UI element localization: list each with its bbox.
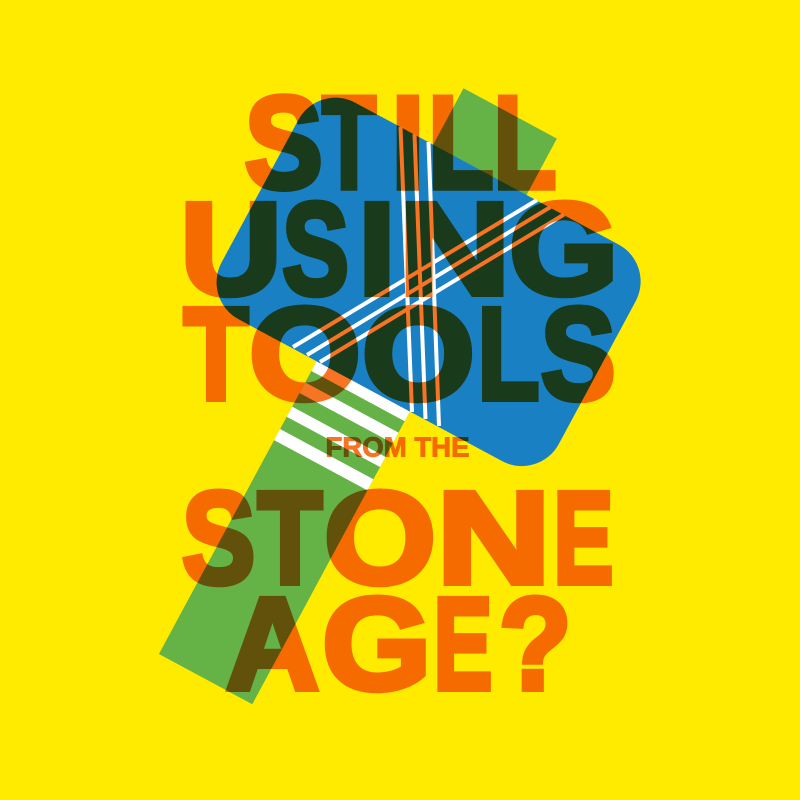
title line: STILL: I (392, 69, 424, 216)
title line: TOOLS: T (184, 280, 248, 427)
title line: USING: N (399, 175, 510, 322)
subtitle: FROM THE: FROM THE (326, 431, 470, 462)
title line: USING: S (282, 175, 349, 322)
title line: STONE: T (258, 464, 322, 611)
title (180, 69, 618, 717)
title line: TOOLS: L (478, 280, 539, 427)
title line: AGE?: E (434, 570, 492, 717)
title line: STONE: S (182, 464, 255, 611)
handle white stripes (274, 361, 410, 490)
title line: STILL: L (493, 69, 556, 216)
title line: USING: I (359, 175, 395, 322)
title line: USING: U (180, 175, 282, 322)
title line: AGE?: G (322, 570, 431, 717)
title line: TOOLS: S (541, 280, 616, 427)
title line: TOOLS: O (249, 280, 361, 427)
title line: STILL: S (245, 69, 323, 216)
title line: AGE?: ? (499, 570, 572, 717)
title line: STONE: O (324, 464, 436, 611)
title line: AGE?: A (226, 570, 319, 717)
title line: USING: G (509, 175, 618, 322)
title line: STILL: T (322, 69, 376, 216)
title line: STONE: E (553, 464, 613, 611)
hammer head (202, 83, 656, 481)
title line: STILL: L (428, 69, 494, 216)
head binding lines (293, 127, 564, 426)
title line: TOOLS: O (362, 280, 475, 427)
icon: stone age hammer (159, 83, 656, 704)
title line: STONE: N (437, 464, 551, 611)
hammer handle (159, 88, 557, 704)
